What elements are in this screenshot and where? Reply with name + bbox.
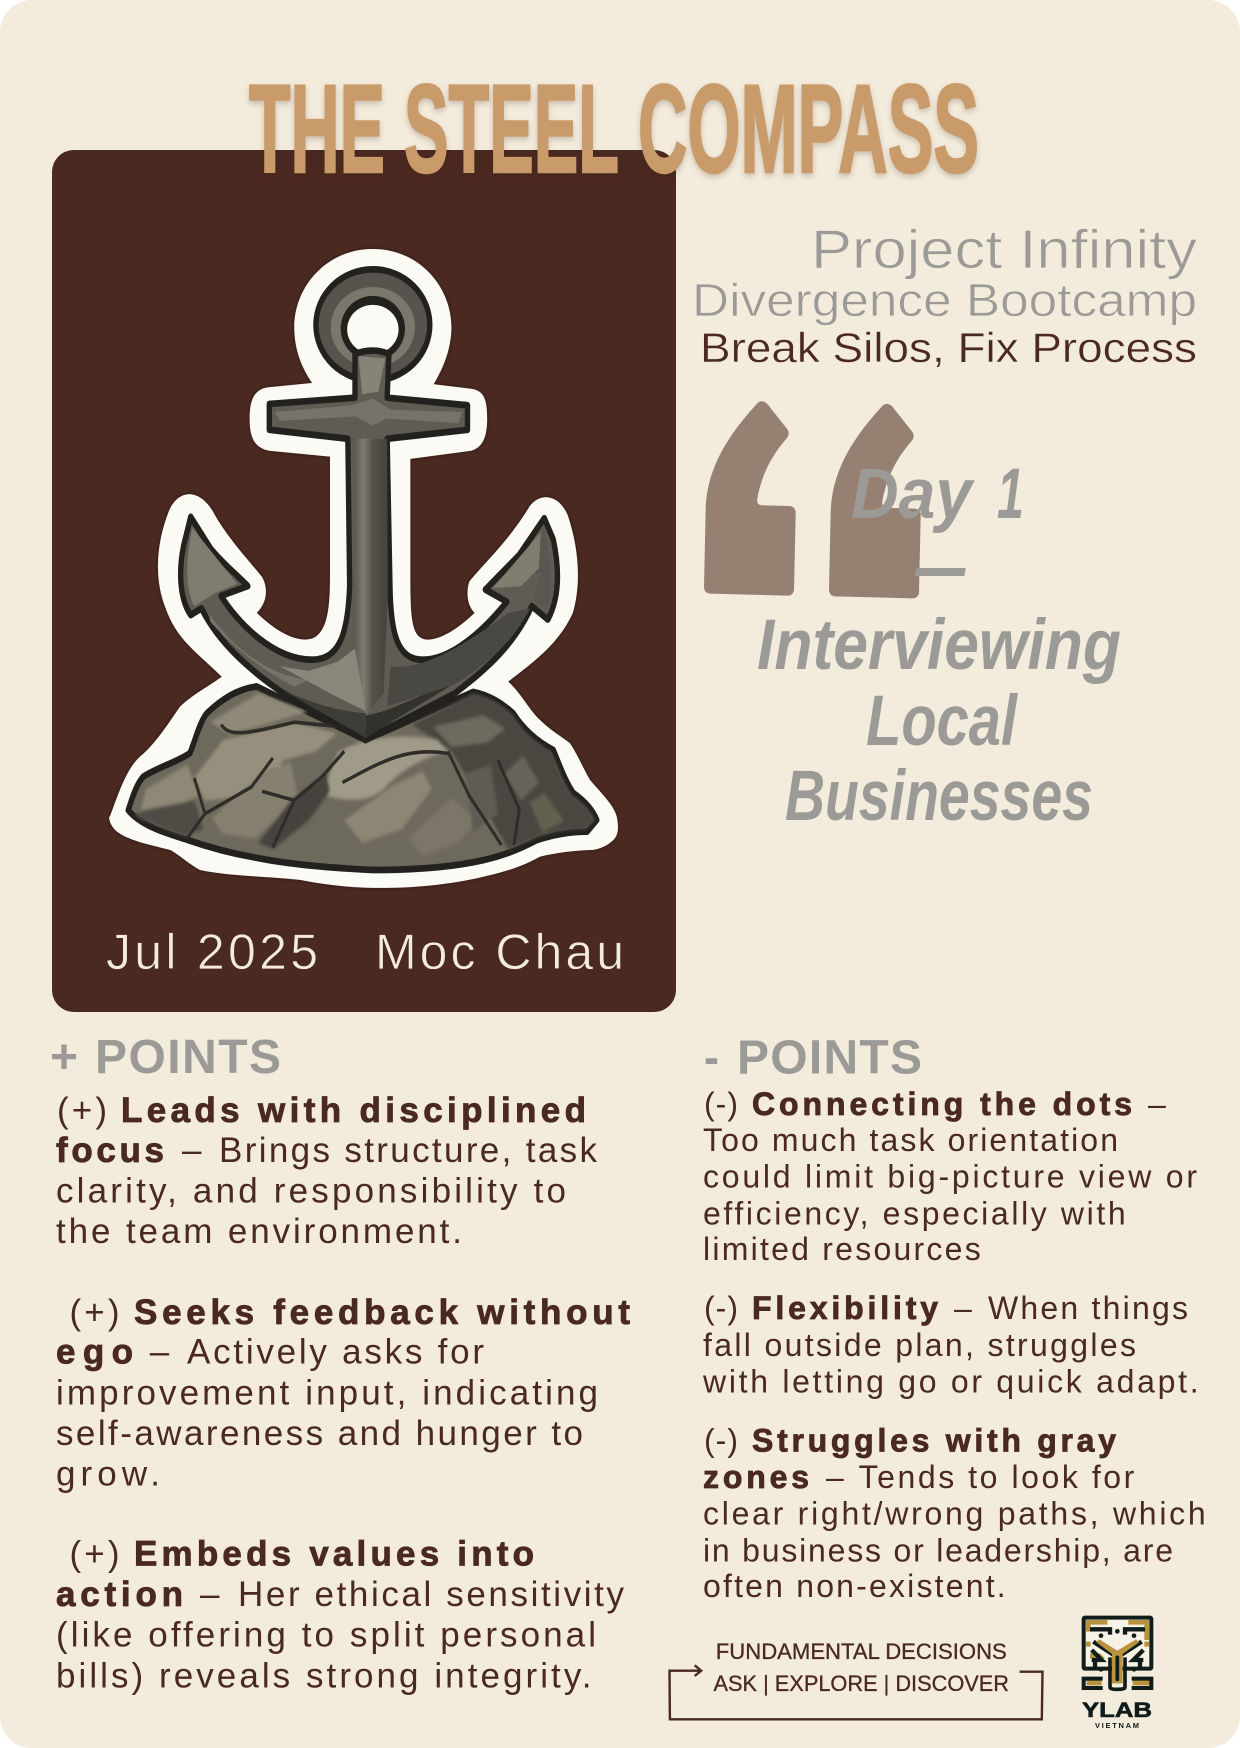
point 3: Tends to look for: [859, 1459, 1135, 1495]
line: businesses: Businesses: [785, 757, 1093, 836]
point 1: –: [182, 1131, 202, 1170]
heading: project info: [692, 218, 1198, 371]
logo wordmark: YLAB: [1082, 1699, 1152, 1722]
arrow: cycle: [670, 1665, 1042, 1719]
point 3: Her ethical sensitivity: [238, 1575, 624, 1614]
point 1: [56, 1091, 598, 1251]
point 3: –: [826, 1459, 844, 1495]
point 3: clear right/wrong paths, which: [703, 1495, 1206, 1531]
line: interviewing: Interviewing: [757, 606, 1121, 685]
point 1: Too much task orientation: [703, 1122, 1118, 1158]
tagline: Break Silos, Fix Process: [700, 324, 1197, 371]
anchor body: [181, 351, 557, 740]
point 2: When things: [988, 1290, 1188, 1326]
point 1: [703, 1086, 1197, 1267]
point 3: action: [56, 1575, 183, 1614]
panel: anchor image: [52, 150, 676, 1012]
point 3: [56, 1534, 624, 1696]
point 2: Flexibility: [752, 1290, 938, 1326]
point 2: [702, 1290, 1199, 1399]
logo: ylab vietnam: [1082, 1618, 1152, 1730]
heading: minus points: -: [704, 1032, 719, 1085]
line: local: Local: [866, 682, 1018, 761]
caption: date: Jul 2025: [106, 924, 318, 980]
point 1: could limit big-picture view or: [703, 1158, 1197, 1194]
day number: 1: [997, 455, 1024, 534]
point 3: (-): [704, 1423, 738, 1459]
point 3: –: [200, 1575, 220, 1614]
point 1: clarity, and responsibility to: [56, 1172, 566, 1210]
point 3: Struggles with gray: [752, 1423, 1116, 1459]
icon: anchor on rock sticker: [109, 249, 618, 888]
footer: fundamental decisions: [670, 1639, 1042, 1719]
sticker outline: [109, 249, 618, 888]
point 2: grow.: [56, 1455, 160, 1494]
title: STEEL: [404, 60, 619, 199]
point 2: [56, 1293, 630, 1494]
caption: location: Moc Chau: [375, 924, 624, 980]
point 1: Brings structure, task: [219, 1131, 598, 1170]
point 2: Actively asks for: [187, 1332, 484, 1372]
dash: [915, 568, 966, 576]
icon: quotation marks: [704, 401, 921, 598]
heading: plus points: +: [50, 1031, 78, 1084]
day label: Day: [851, 455, 975, 534]
panel: plus points: [50, 1031, 630, 1696]
point 3: zones: [703, 1459, 809, 1495]
point 1: focus: [56, 1131, 164, 1170]
rock: [128, 687, 597, 870]
point 1: the team environment.: [56, 1212, 462, 1251]
project name: Project Infinity: [811, 218, 1198, 280]
point 2: –: [954, 1290, 972, 1326]
point 1: (-): [704, 1086, 738, 1122]
logo mark: [1084, 1618, 1151, 1689]
point 2: ego: [56, 1332, 133, 1372]
bootcamp name: Divergence Bootcamp: [692, 274, 1197, 326]
point 2: (-): [704, 1290, 738, 1326]
point 1: Connecting the dots: [752, 1086, 1132, 1122]
footer line 1: FUNDAMENTAL DECISIONS: [716, 1639, 1007, 1664]
point 2: –: [150, 1332, 170, 1372]
point 3: (like offering to split personal: [56, 1616, 596, 1655]
panel background: [52, 150, 676, 1012]
title: THE: [249, 60, 385, 199]
point 3: [703, 1423, 1206, 1604]
point 2: self-awareness and hunger to: [56, 1414, 583, 1453]
panel: minus points: [702, 1032, 1206, 1604]
point 2: improvement input, indicating: [56, 1373, 598, 1412]
heading: day 1 interviewing local businesses: [757, 455, 1121, 836]
point 2: with letting go or quick adapt.: [702, 1363, 1199, 1399]
point 3: Embeds values into: [134, 1534, 534, 1574]
anchor ring: [313, 266, 432, 384]
point 3: bills) reveals strong integrity.: [56, 1657, 592, 1696]
heading: plus points: POINTS: [95, 1031, 281, 1084]
point 1: limited resources: [703, 1231, 981, 1267]
point 1: efficiency, especially with: [703, 1196, 1126, 1232]
point 3: in business or leadership, are: [703, 1532, 1173, 1568]
point 1: –: [1148, 1086, 1166, 1122]
point 1: Leads with disciplined: [121, 1091, 586, 1130]
logo subtext: VIETNAM: [1095, 1721, 1139, 1730]
point 1: (+): [57, 1091, 107, 1130]
footer line 2: ASK | EXPLORE | DISCOVER: [714, 1671, 1009, 1696]
heading: minus points: POINTS: [737, 1032, 922, 1085]
point 2: Seeks feedback without: [134, 1293, 630, 1332]
point 3: often non-existent.: [703, 1568, 1006, 1604]
point 2: (+): [70, 1293, 120, 1332]
point 2: fall outside plan, struggles: [703, 1327, 1136, 1363]
title: [249, 60, 979, 199]
point 3: (+): [70, 1534, 120, 1574]
